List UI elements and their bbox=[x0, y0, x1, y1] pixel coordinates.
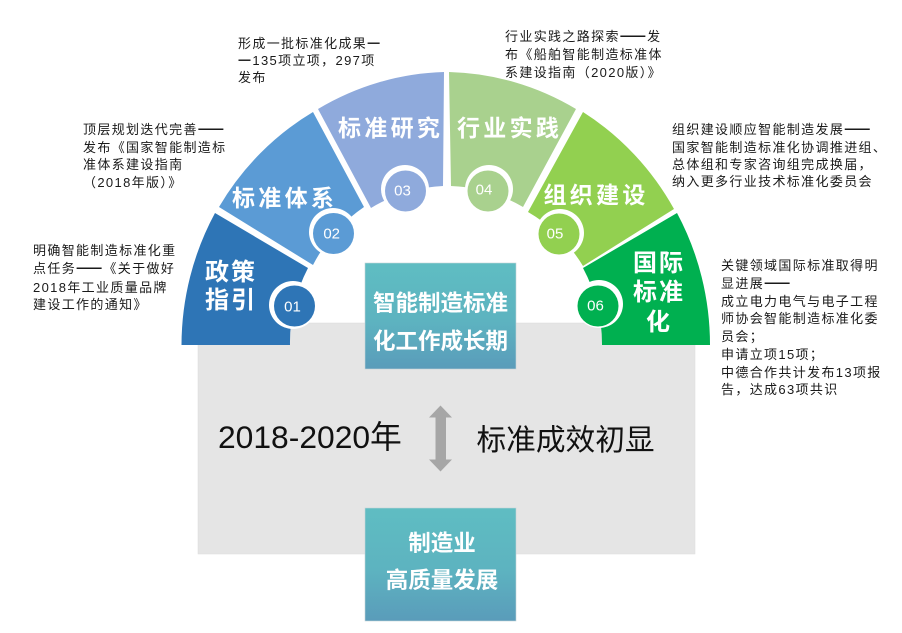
bottom teal box: 高质量发展 bbox=[386, 568, 498, 593]
text block 1: 2018年工业质量品牌 bbox=[33, 280, 168, 295]
text block 6: 师协会智能制造标准化委 bbox=[721, 311, 879, 326]
text block 6: 告，达成63项共识 bbox=[721, 382, 839, 397]
badge 01: 01 bbox=[284, 298, 301, 316]
badge 02 bbox=[309, 208, 357, 256]
text block 1: 明确智能制造标准化重 bbox=[33, 243, 177, 258]
top teal box: 化工作成长期 bbox=[373, 329, 508, 354]
segment 2: 标准体系 bbox=[219, 112, 364, 265]
text block 6: 成立电力电气与电子工程 bbox=[721, 294, 879, 309]
segment 4: 行业实践: 行业实践 bbox=[457, 115, 562, 141]
segment 6: 国际标准化: 标准 bbox=[633, 279, 685, 306]
segment 3: 标准研究: 标准研究 bbox=[338, 115, 443, 141]
text block 3: 形成一批标准化成果— bbox=[238, 33, 382, 52]
segment 6: 国际标准化: 国际 bbox=[633, 250, 685, 277]
result label: 标准成效初显 bbox=[476, 424, 655, 457]
text block 6: 显进展—— bbox=[721, 273, 791, 292]
bottom teal box: 制造业 bbox=[408, 531, 476, 556]
text block 1: 点任务——《关于做好 bbox=[33, 258, 175, 277]
badge 03 bbox=[381, 165, 429, 213]
segment 1: 政策指引 bbox=[182, 213, 308, 345]
segment 5: 组织建设 bbox=[528, 112, 674, 266]
grey background panel bbox=[198, 323, 695, 554]
text block 4: 行业实践之路探索——发 bbox=[505, 26, 662, 45]
text block 5: 国家智能制造标准化协调推进组、 bbox=[672, 140, 887, 155]
top teal box bbox=[365, 263, 516, 369]
badge 06 bbox=[575, 280, 623, 328]
segment 1: 政策指引: 政策 bbox=[205, 259, 257, 286]
segment 6: 国际标准化: 化 bbox=[646, 309, 672, 336]
badge 04: 04 bbox=[476, 182, 492, 198]
text block 2: 顶层规划迭代完善—— bbox=[83, 119, 225, 138]
top teal box: 智能制造标准 bbox=[373, 291, 508, 316]
segment 4: 行业实践 bbox=[449, 72, 576, 207]
segment 2: 标准体系: 标准体系 bbox=[232, 185, 337, 211]
text block 1: 建设工作的通知》 bbox=[33, 297, 148, 312]
years label: 2018-2020年 bbox=[218, 419, 402, 455]
text block 1 bbox=[33, 243, 177, 312]
text block 2: 发布《国家智能制造标 bbox=[83, 140, 227, 155]
text block 2 bbox=[83, 119, 227, 190]
badge 05 bbox=[536, 209, 584, 257]
text block 6: 关键领域国际标准取得明 bbox=[721, 258, 879, 273]
text block 4: 系建设指南（2020版）》 bbox=[505, 65, 662, 80]
text block 3: —135项立项，297项 bbox=[238, 50, 376, 69]
text block 6: 申请立项15项； bbox=[721, 347, 824, 363]
segment 1: 政策指引: 指引 bbox=[205, 287, 257, 314]
badge 04 bbox=[465, 165, 513, 213]
text block 2: 准体系建设指南 bbox=[83, 157, 183, 172]
text block 4 bbox=[505, 26, 663, 80]
badge 05: 05 bbox=[547, 226, 563, 242]
text block 6 bbox=[721, 258, 882, 397]
segment 5: 组织建设: 组织建设 bbox=[544, 182, 649, 208]
bottom teal box bbox=[365, 508, 516, 621]
badge 02: 02 bbox=[323, 226, 340, 242]
text block 5: 组织建设顺应智能制造发展—— bbox=[672, 119, 872, 138]
text block 6: 中德合作共计发布13项报 bbox=[721, 365, 882, 380]
double arrow bbox=[429, 406, 452, 472]
text block 5 bbox=[672, 119, 887, 189]
text block 4: 布《船舶智能制造标准体 bbox=[505, 47, 663, 62]
text block 6: 员会； bbox=[721, 329, 764, 345]
badge 06: 06 bbox=[587, 298, 604, 314]
segment 6: 国际标准化 bbox=[583, 213, 710, 345]
badge 03: 03 bbox=[394, 182, 411, 200]
text block 3 bbox=[238, 33, 382, 85]
text block 2: （2018年版）》 bbox=[83, 175, 183, 190]
text block 5: 总体组和专家咨询组完成换届， bbox=[672, 157, 873, 172]
badge 01 bbox=[269, 281, 317, 329]
text block 5: 纳入更多行业技术标准化委员会 bbox=[672, 174, 873, 189]
text block 3: 发布 bbox=[238, 70, 267, 85]
segment 3: 标准研究 bbox=[318, 72, 444, 208]
